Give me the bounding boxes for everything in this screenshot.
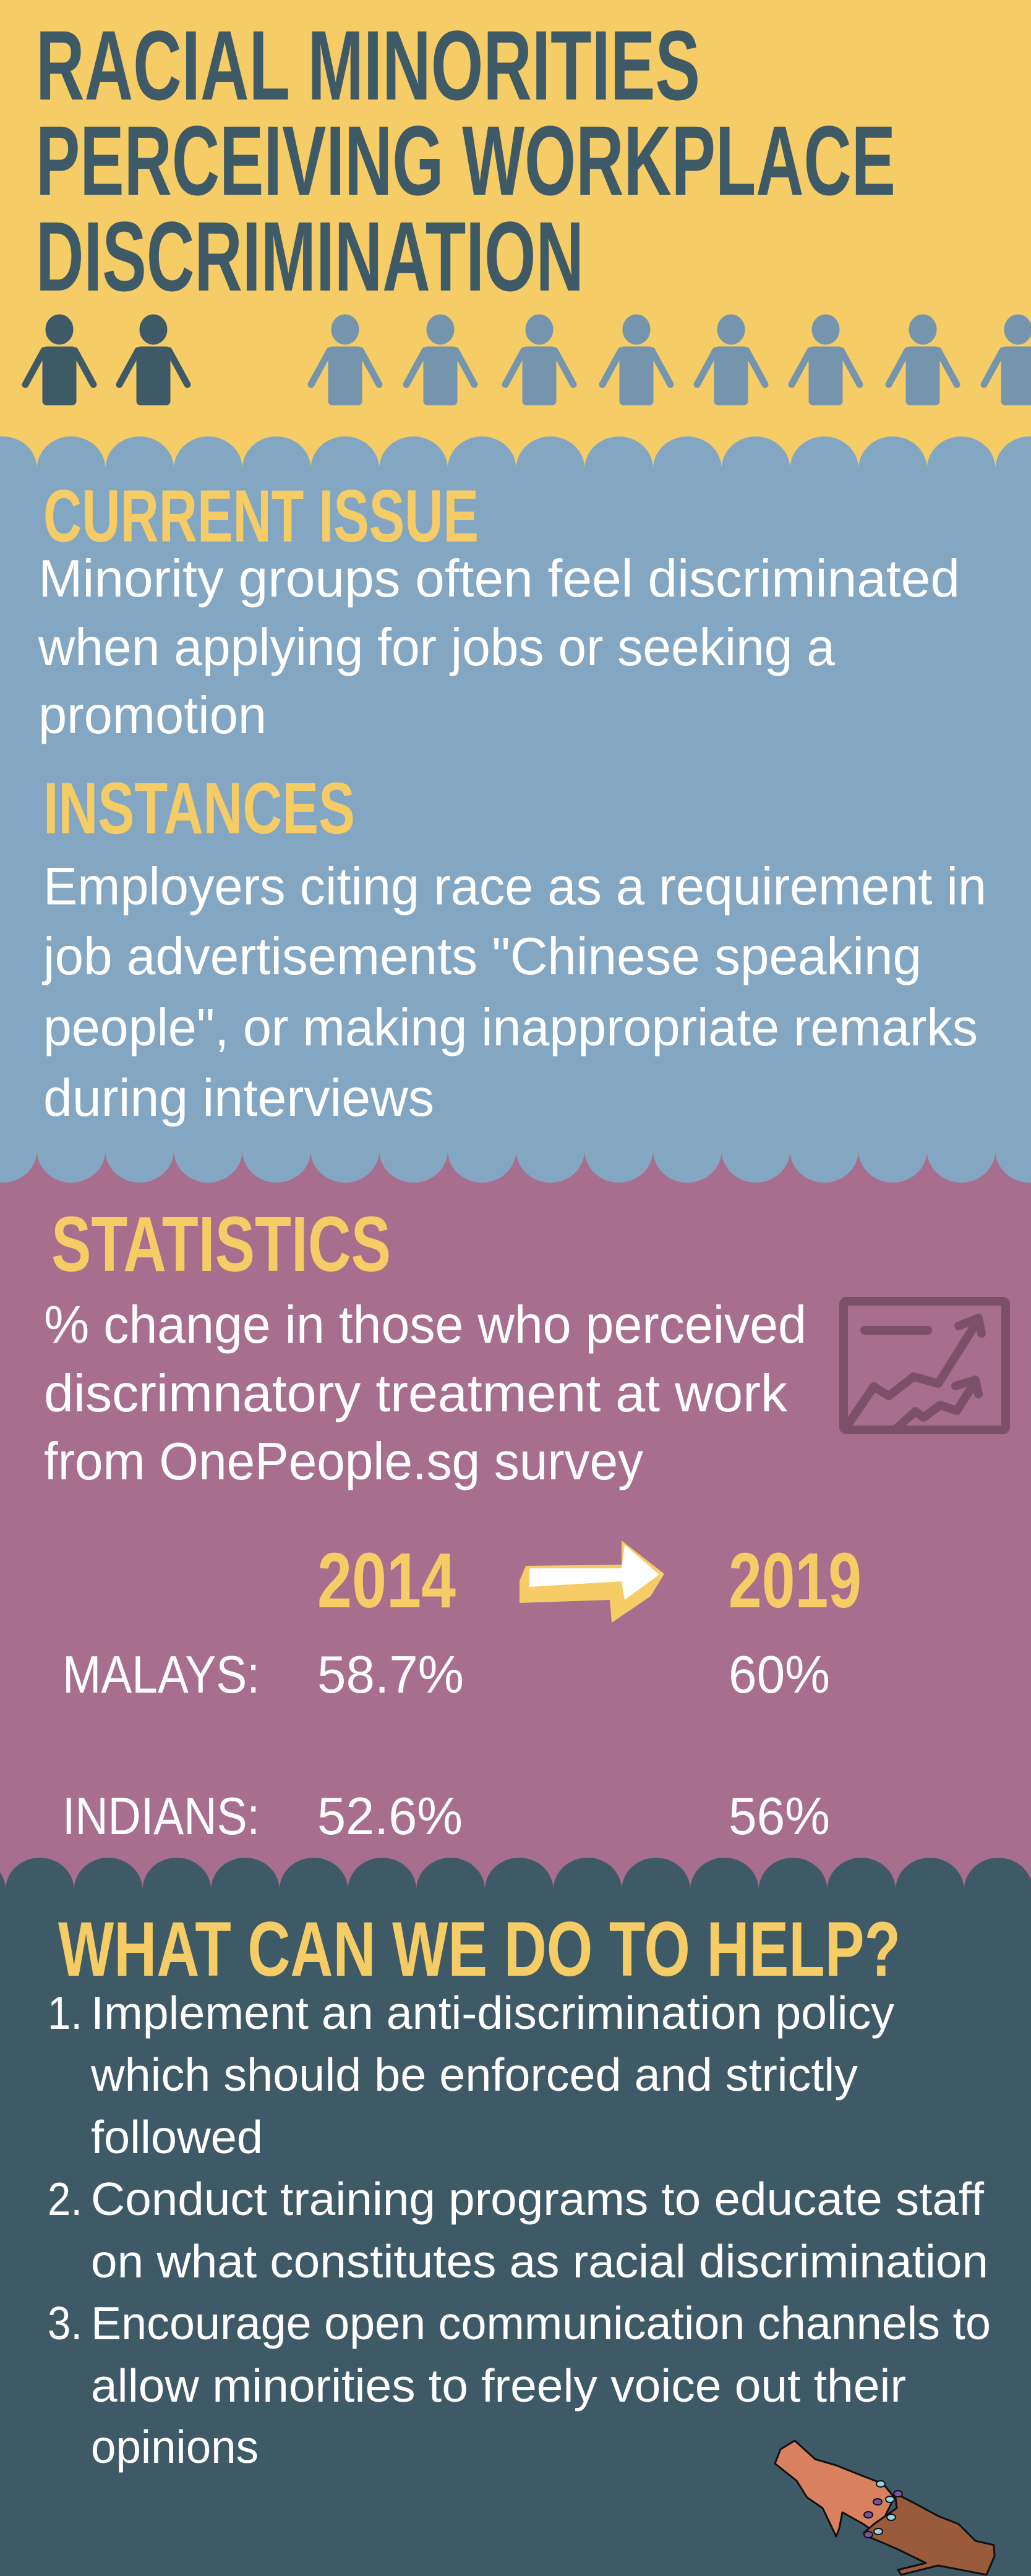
panel: instances: [41, 768, 986, 1128]
row: malays: 60%: [729, 1646, 830, 1704]
text block: instances: Employers citing race as a requirement in: [43, 857, 986, 916]
list item 2: on what constitutes as racial discrimination: [91, 2235, 988, 2287]
text block: instances: people", or making inappropriate remarks: [43, 998, 978, 1057]
text block: current issue: promotion: [38, 686, 267, 745]
list item 3: 3.: [48, 2297, 82, 2349]
year: 2014: 2014: [317, 1537, 456, 1624]
list item 1: 1.: [48, 1987, 82, 2039]
row: indians: [62, 1787, 830, 1846]
arrow: 2014 to 2019: [520, 1541, 664, 1623]
list item 2: 2.: [48, 2173, 82, 2225]
panel: current issue: [38, 475, 960, 745]
row: malays: MALAYS:: [62, 1646, 260, 1704]
list item 2: [48, 2173, 988, 2287]
row: malays: [62, 1646, 830, 1704]
text block: current issue: when applying for jobs or seeking a: [38, 618, 836, 677]
list item 3: opinions: [91, 2421, 259, 2473]
icon: joining hands: [775, 2441, 995, 2575]
list item 1: Implement an anti-discrimination policy: [91, 1987, 894, 2039]
list item 3: [48, 2297, 991, 2473]
list item 1: followed: [91, 2111, 263, 2163]
icon row: people (minorities highlighted): [25, 315, 1031, 405]
row: indians: 56%: [729, 1787, 830, 1846]
title: DISCRIMINATION: [36, 201, 584, 312]
list item 1: [48, 1987, 894, 2163]
list item 2: Conduct training programs to educate staff: [91, 2173, 984, 2225]
year: 2019: 2019: [729, 1537, 862, 1624]
icon: rising chart: [844, 1301, 1006, 1430]
title: [36, 10, 896, 312]
heading: current issue: CURRENT ISSUE: [43, 475, 479, 558]
text block: statistics description: [44, 1296, 806, 1491]
row: malays: 58.7%: [317, 1646, 464, 1704]
text block: statistics description: discrimnatory treatment at work: [44, 1364, 787, 1423]
list item 3: allow minorities to freely voice out their: [91, 2360, 906, 2412]
text block: statistics description: % change in those who perceived: [44, 1296, 806, 1354]
panel: statistics: [44, 1201, 1006, 1846]
heading: instances: INSTANCES: [43, 768, 355, 849]
title: RACIAL MINORITIES: [36, 10, 700, 121]
text block: statistics description: from OnePeople.sg survey: [44, 1432, 643, 1491]
list item 3: Encourage open communication channels to: [91, 2297, 991, 2349]
text block: current issue: [38, 550, 960, 745]
list item 1: which should be enforced and strictly: [90, 2049, 858, 2101]
text block: instances: job advertisements "Chinese speaking: [41, 927, 922, 986]
row: indians: INDIANS:: [62, 1787, 260, 1846]
text block: instances: during interviews: [43, 1069, 434, 1128]
row: indians: 52.6%: [317, 1787, 463, 1846]
text block: instances: [41, 857, 986, 1128]
heading: statistics: STATISTICS: [51, 1201, 391, 1288]
text block: current issue: Minority groups often feel discriminated: [38, 550, 960, 608]
panel: what can we do: [48, 1906, 995, 2575]
